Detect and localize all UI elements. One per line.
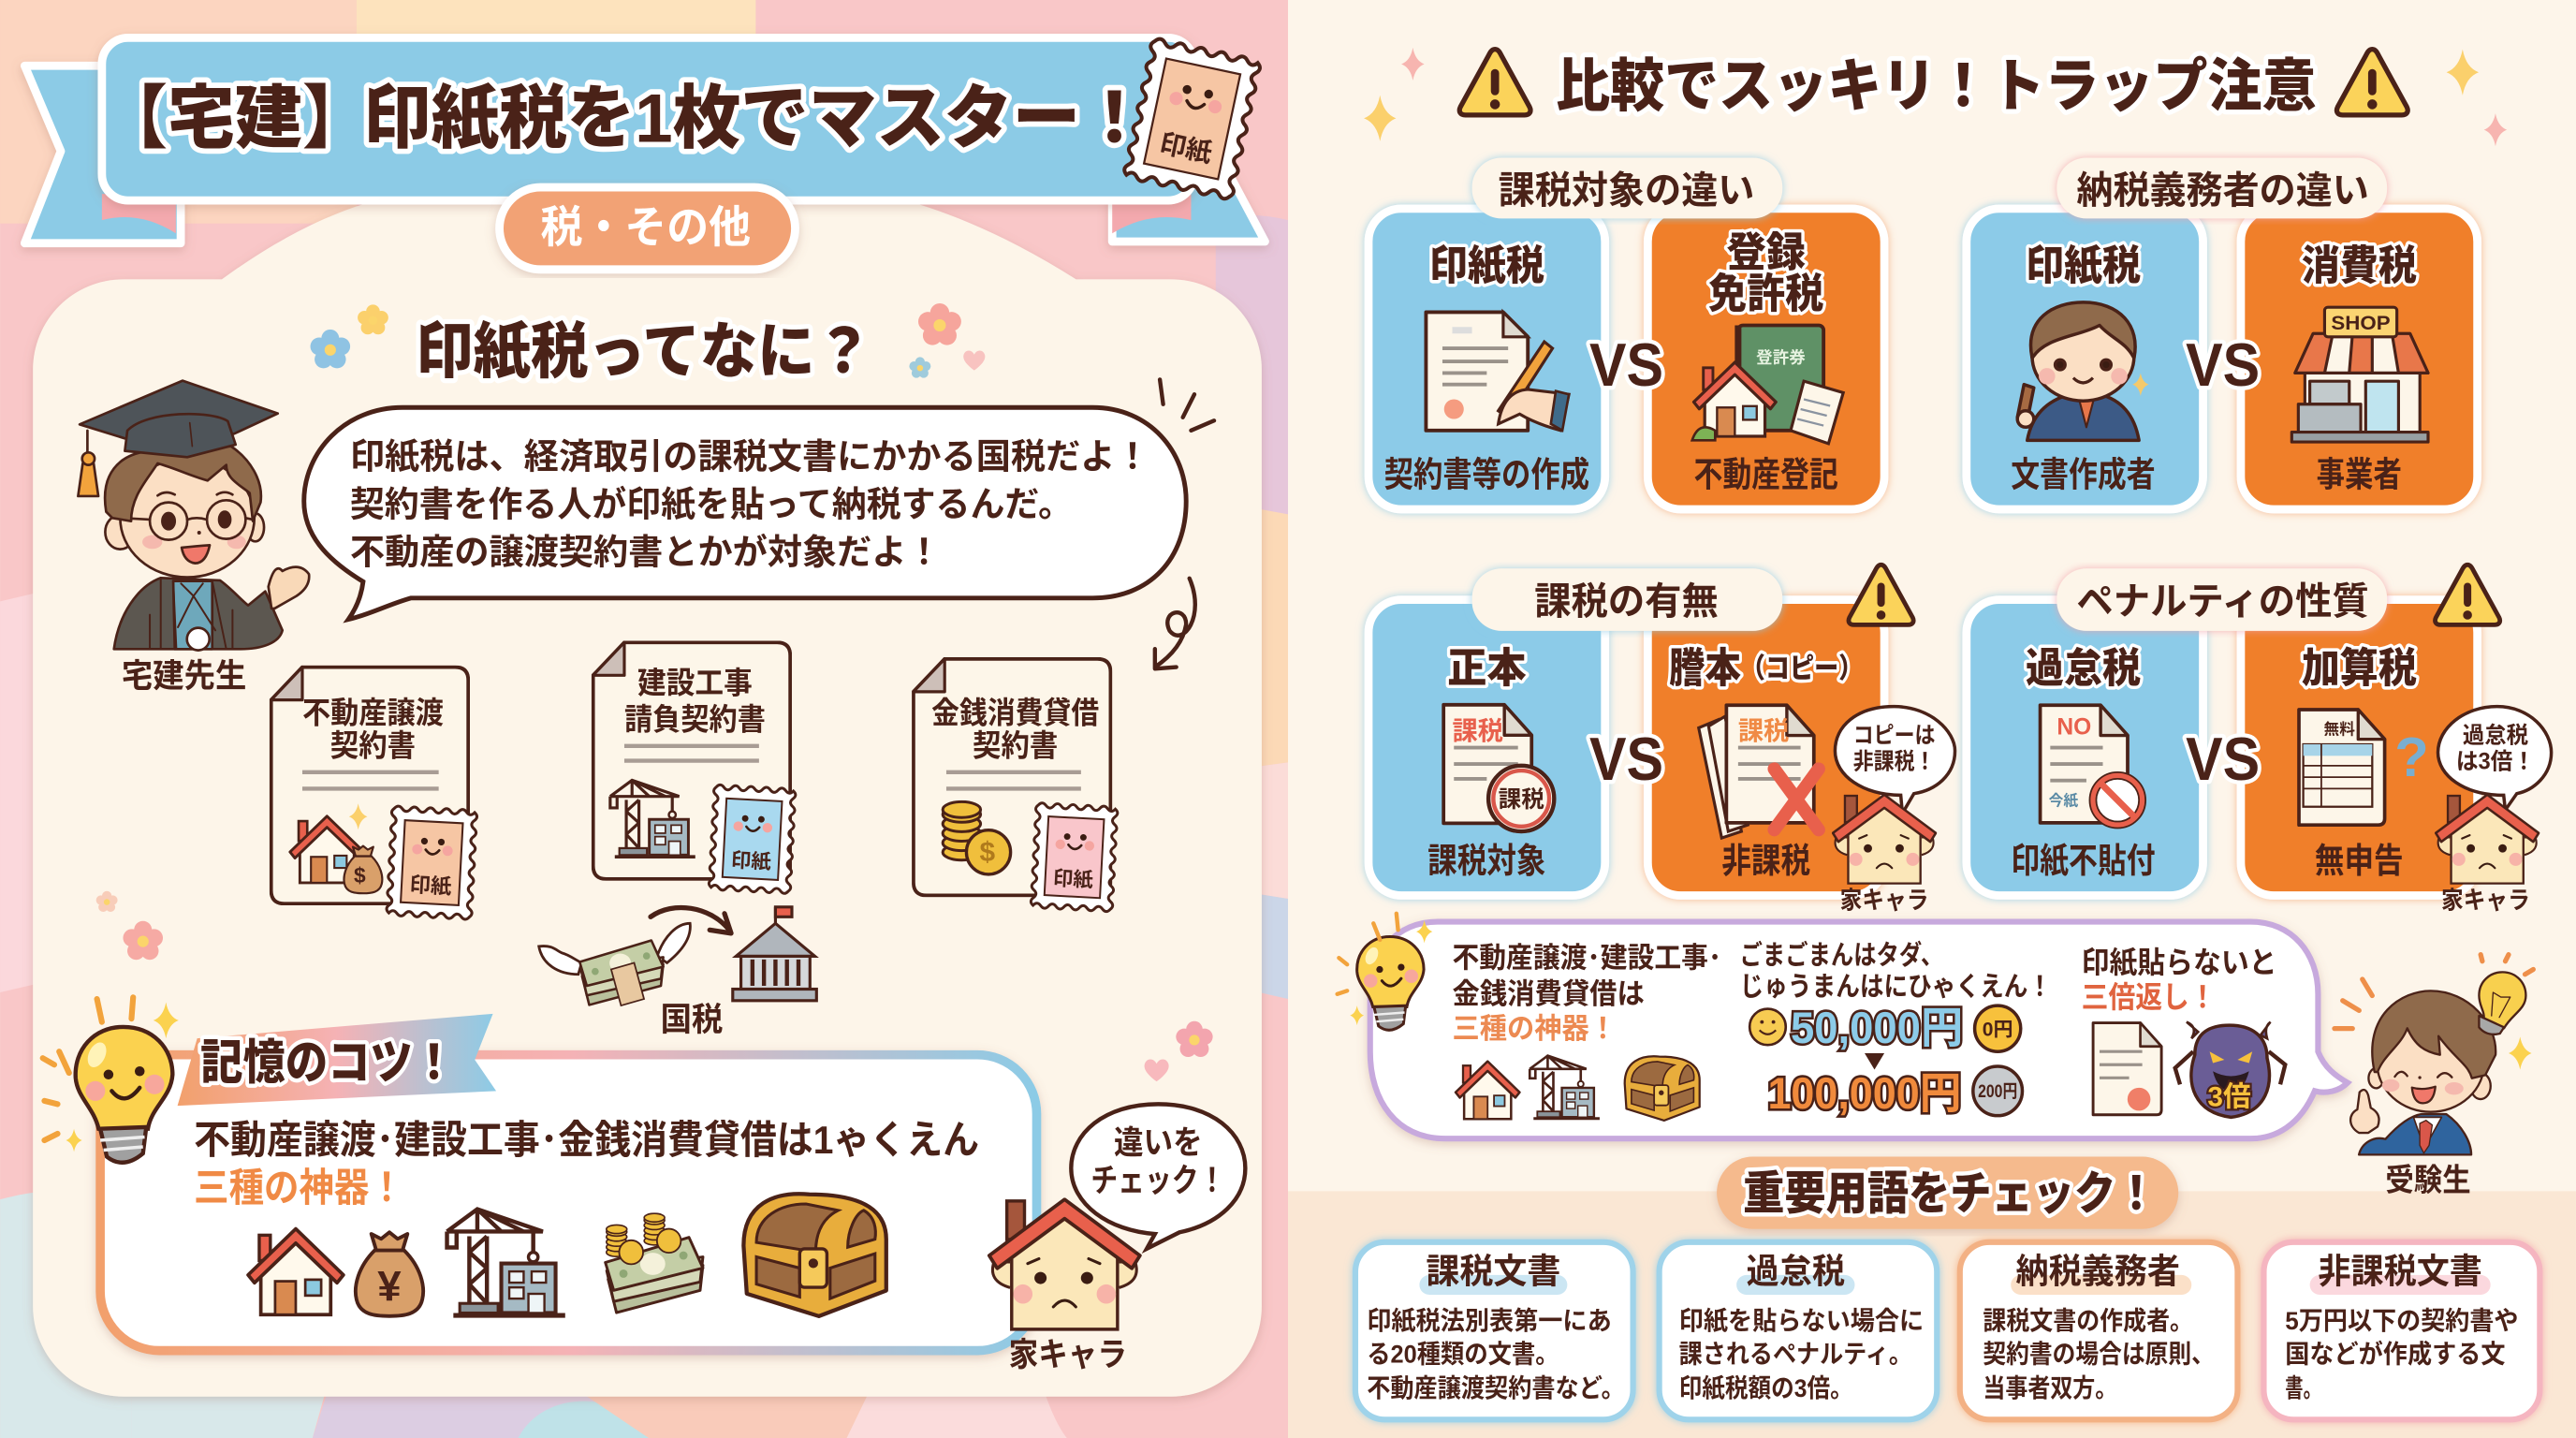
label: VS: VS: [1589, 330, 1663, 399]
banner: 記憶のコツ！: [178, 1014, 496, 1106]
icon: unstamped document: 今紙: [2049, 792, 2078, 810]
character: 家キャラ with comment: 家キャラ: [2441, 886, 2530, 914]
icon: copies crossed out: [1699, 705, 1819, 838]
card: 謄本: [1647, 600, 1884, 895]
icon: money and coins: [606, 1213, 703, 1313]
icon: winged money to national tax: [539, 907, 816, 1038]
character: 家キャラ with comment: [2436, 707, 2552, 914]
card: 納税義務者: 契約書の場合は原則、: [1983, 1339, 2215, 1368]
character: 家キャラ with comment: 過怠税: [2463, 722, 2528, 748]
card: 過怠税: 印紙税額の3倍。: [1679, 1373, 1853, 1402]
text: three treasures: [1453, 941, 1721, 1045]
stamp: title: [1122, 37, 1262, 200]
card: 非課税文書: 5万円以下の契約書や: [2285, 1306, 2519, 1335]
pill: ペナルティの性質: ペナルティの性質: [2076, 580, 2369, 623]
icon: smiling bulb: [43, 997, 179, 1163]
icon: warning: [2436, 565, 2500, 624]
icon: signing contract: [1426, 312, 1569, 431]
icon: certificate book and house: 登許券: [1756, 348, 1806, 367]
label: 宅建先生: [122, 658, 246, 695]
heading: comparison: 比較でスッキリ！トラップ注意: [1556, 54, 2317, 119]
card: 過怠税: [1660, 1242, 1937, 1419]
document: 金銭消費貸借契約書: [914, 659, 1118, 912]
speech bubble: explanation: 不動産の譲渡契約書とかが対象だよ！: [350, 532, 942, 571]
icon: unstamped document: NO: [2056, 715, 2091, 741]
card: 登録免許税: 不動産登記: [1693, 455, 1838, 493]
title text: 【宅建】: [100, 80, 370, 157]
icon: copies crossed out: 課税: [1738, 716, 1789, 745]
chart: amount and tax: 50,000円: [1791, 1004, 1963, 1053]
text: three treasures: 金銭消費貸借は: [1453, 977, 1645, 1010]
card: 印紙税: 印紙税: [1429, 242, 1544, 288]
text: triple penalty: [2082, 946, 2277, 1014]
icon: devil: [2175, 1022, 2285, 1117]
card: 納税義務者: 課税文書の作成者。: [1983, 1306, 2193, 1335]
pill: 課税の有無: 課税の有無: [1534, 580, 1719, 623]
title text: 印紙税を1枚でマスター！: [363, 80, 1149, 157]
banner: 記憶のコツ！: 記憶のコツ！: [200, 1036, 455, 1090]
stamp: pink: [1031, 802, 1118, 912]
text: three treasures: 三種の神器！: [1453, 1012, 1617, 1045]
character: 家キャラ with comment: 家キャラ: [1840, 886, 1928, 914]
card: 登録免許税: 免許税: [1708, 271, 1823, 316]
document: 建設工事請負契約書: 建設工事: [637, 667, 753, 700]
icon: taxable document: 課税: [1453, 716, 1503, 745]
heading: comparison: [1364, 48, 2507, 146]
character: 家キャラ: 家キャラ: [1009, 1337, 1127, 1373]
card: 課税文書: 不動産譲渡契約書など。: [1367, 1373, 1625, 1402]
document: 金銭消費貸借契約書: 契約書: [973, 728, 1058, 762]
document: 建設工事請負契約書: [593, 642, 796, 894]
heading: key terms: [1717, 1157, 2178, 1229]
icon: idea bulb: [2479, 972, 2525, 1035]
title banner: [24, 37, 1265, 270]
card: 課税文書: 印紙税法別表第一にあ: [1367, 1306, 1612, 1335]
label: VS: VS: [1589, 725, 1663, 793]
icon: sparkles: [1364, 48, 2507, 146]
stamp: blue: 印紙: [730, 849, 772, 873]
card: 消費税: [2241, 209, 2478, 509]
card: 消費税: SHOP: [2331, 313, 2391, 334]
document: 不動産譲渡契約書: 不動産譲渡: [302, 696, 444, 729]
character: 家キャラ with comment: [1833, 707, 1955, 914]
speech bubble: 違いをチェック！: [1071, 1104, 1245, 1249]
icon: tax return with question: ?: [2394, 726, 2429, 788]
icon: document writer boy: [2017, 302, 2139, 440]
card: 印紙税: 文書作成者: [2011, 455, 2156, 493]
document: 金銭消費貸借契約書: $: [980, 837, 996, 868]
label: 受験生: [2385, 1164, 2471, 1198]
card: 課税文書: [1355, 1242, 1633, 1419]
icon: money bag: [356, 1232, 423, 1316]
character: 受験生: [2334, 955, 2533, 1198]
panel: ペナルティの性質: [1967, 565, 2552, 914]
pill: 納税義務者の違い: 納税義務者の違い: [2076, 169, 2369, 212]
pill: ペナルティの性質: [2056, 568, 2387, 631]
card: 登録免許税: [1647, 209, 1884, 509]
icon: taxable document: [1443, 705, 1554, 831]
speech bubble: explanation: [304, 407, 1186, 620]
card: 印紙税: [1368, 209, 1605, 509]
text: pun: ごまごまんはタダ、: [1740, 940, 1943, 971]
card: 正本: 正本: [1447, 645, 1527, 691]
icons: house crane chest: [1456, 1056, 1700, 1121]
pill: category: [500, 187, 795, 270]
character: 家キャラ: [989, 1199, 1140, 1373]
stamp: pink: 印紙: [1052, 867, 1094, 891]
icon: tax return with question: [2299, 710, 2429, 825]
document: 建設工事請負契約書: 請負契約書: [624, 702, 766, 736]
icon: document: [2093, 1023, 2161, 1115]
card: 謄本: 謄本（コピー）: [1669, 645, 1863, 691]
right page background: [1288, 0, 2576, 1438]
card: 課税文書: 課税文書: [1426, 1253, 1560, 1291]
card: 過怠税: 印紙不貼付: [2011, 842, 2156, 880]
speech bubble: 違いをチェック！: チェック！: [1090, 1163, 1225, 1199]
chart: amount and tax: 0円: [1983, 1020, 2013, 1041]
panel: memory tip: [43, 997, 1036, 1351]
chart: amount and tax: 200円: [1978, 1082, 2017, 1102]
document: 金銭消費貸借契約書: 金銭消費貸借: [931, 696, 1099, 729]
text: mnemonic: 不動産譲渡･建設工事･金銭消費貸借は1ゃくえん: [194, 1118, 979, 1162]
icon: tax return with question: 無料: [2324, 720, 2355, 738]
panel: memory tip: 三種の神器！: [194, 1166, 404, 1210]
text: triple penalty: 三倍返し！: [2082, 980, 2217, 1014]
icon: certificate book and house: [1692, 325, 1843, 444]
pill: 課税の有無: [1472, 568, 1782, 631]
card: 加算税: [2241, 600, 2478, 895]
speech bubble: 違いをチェック！: 違いを: [1114, 1125, 1203, 1162]
card: 正本: [1368, 600, 1605, 895]
pill: 課税対象の違い: [1472, 157, 1782, 218]
card: 加算税: 加算税: [2302, 645, 2417, 691]
stamp: orange: 印紙: [409, 873, 453, 899]
label: VS: VS: [2186, 330, 2260, 399]
icon: house: [248, 1229, 344, 1314]
icon: taxable document: 課税: [1499, 786, 1544, 813]
heading: key terms: 重要用語をチェック！: [1743, 1169, 2157, 1220]
stamp: title: 印紙: [1157, 128, 1215, 168]
ribbon tails: [24, 66, 1265, 243]
icon: emphasis ticks: [2334, 955, 2533, 1029]
pill: category: 税・その他: [540, 203, 751, 253]
panel: 納税義務者の違い: [1967, 157, 2478, 509]
icon: unstamped document: [2041, 705, 2143, 825]
chart: amount and tax: [1749, 1004, 2022, 1119]
stamp: blue: [709, 785, 796, 894]
card: 印紙税: 契約書等の作成: [1384, 455, 1589, 493]
panel: 課税対象の違い: [1368, 157, 1884, 509]
card: 加算税: 無申告: [2315, 842, 2404, 880]
icon: treasure chest: [743, 1194, 886, 1316]
pill: 納税義務者の違い: [2056, 157, 2387, 218]
character: 家キャラ with comment: は3倍！: [2456, 748, 2535, 774]
card: 非課税文書: [2263, 1242, 2539, 1419]
icon: bulb: [1338, 914, 1432, 1030]
card: 過怠税: 印紙を貼らない場合に: [1679, 1306, 1924, 1335]
text: triple penalty: 印紙貼らないと: [2082, 946, 2277, 979]
character: 宅建先生: [78, 381, 309, 695]
card: 非課税文書: 国などが作成する文: [2285, 1339, 2505, 1368]
document: 不動産譲渡契約書: 契約書: [330, 728, 416, 762]
heading: 印紙税ってなに？: 印紙税ってなに？: [416, 317, 872, 386]
icon: government building: [733, 907, 816, 1001]
card: 印紙税: [1967, 209, 2203, 509]
icon: crane: [447, 1210, 565, 1315]
arrow: curly to documents: [1155, 579, 1195, 668]
text: three treasures: 不動産譲渡･建設工事･: [1453, 941, 1721, 974]
card: 登録免許税: 登録: [1727, 229, 1806, 275]
icon: warning: [1849, 565, 1913, 624]
card: 過怠税: [1967, 600, 2203, 895]
speech bubble: explanation: 契約書を作る人が印紙を貼って納税するんだ。: [350, 484, 1073, 523]
icon: emphasis ticks: [1160, 379, 1214, 431]
card: 納税義務者: 納税義務者: [2015, 1253, 2180, 1291]
icon: devil: 3倍: [2207, 1082, 2251, 1113]
panel: 課税の有無: [1368, 565, 1955, 914]
label: VS: VS: [2186, 725, 2260, 793]
card: 謄本: 非課税: [1721, 842, 1810, 880]
icon: decorative flowers: [96, 303, 1213, 1081]
card: 納税義務者: 当事者双方。: [1983, 1373, 2117, 1402]
card: 過怠税: 課されるペナルティ。: [1679, 1339, 1912, 1368]
card: 印紙税: 印紙税: [2026, 242, 2141, 288]
card: 課税文書: る20種類の文書。: [1367, 1339, 1559, 1368]
document: 不動産譲渡契約書: $: [354, 863, 366, 888]
card: 正本: 課税対象: [1427, 842, 1546, 880]
icon: warning right: [2336, 50, 2408, 115]
character: 家キャラ with comment: コピーは: [1853, 723, 1935, 748]
icon: warning left: [1459, 50, 1530, 115]
chart: amount and tax: 100,000円: [1767, 1069, 1962, 1119]
left page background: [0, 0, 1288, 1438]
speech bubble: explanation: 印紙税は、経済取引の課税文書にかかる国税だよ！: [350, 437, 1150, 477]
icon: money bag: ¥: [377, 1262, 402, 1310]
card: 消費税: 消費税: [2302, 242, 2417, 288]
label: 国税: [661, 1002, 723, 1038]
pill: 課税対象の違い: 課税対象の違い: [1499, 169, 1754, 212]
character: 家キャラ with comment: 非課税！: [1853, 748, 1935, 774]
icon: shop: [2291, 307, 2428, 442]
card: 非課税文書: 書。: [2285, 1373, 2321, 1402]
icon: sparkle: [2509, 1036, 2532, 1070]
card: 納税義務者: [1960, 1242, 2237, 1419]
text: pun: じゅうまんはにひゃくえん！: [1740, 972, 2052, 1002]
card: 過怠税: 過怠税: [2026, 645, 2141, 691]
text: pun: [1740, 940, 2052, 1002]
card: 非課税文書: 非課税文書: [2318, 1253, 2482, 1291]
card: 過怠税: 過怠税: [1747, 1253, 1845, 1291]
document: 不動産譲渡契約書: [271, 668, 477, 919]
panel: mnemonic bubble: [1338, 914, 2348, 1138]
stamp: orange: [387, 806, 477, 919]
card: 消費税: 事業者: [2317, 455, 2402, 493]
